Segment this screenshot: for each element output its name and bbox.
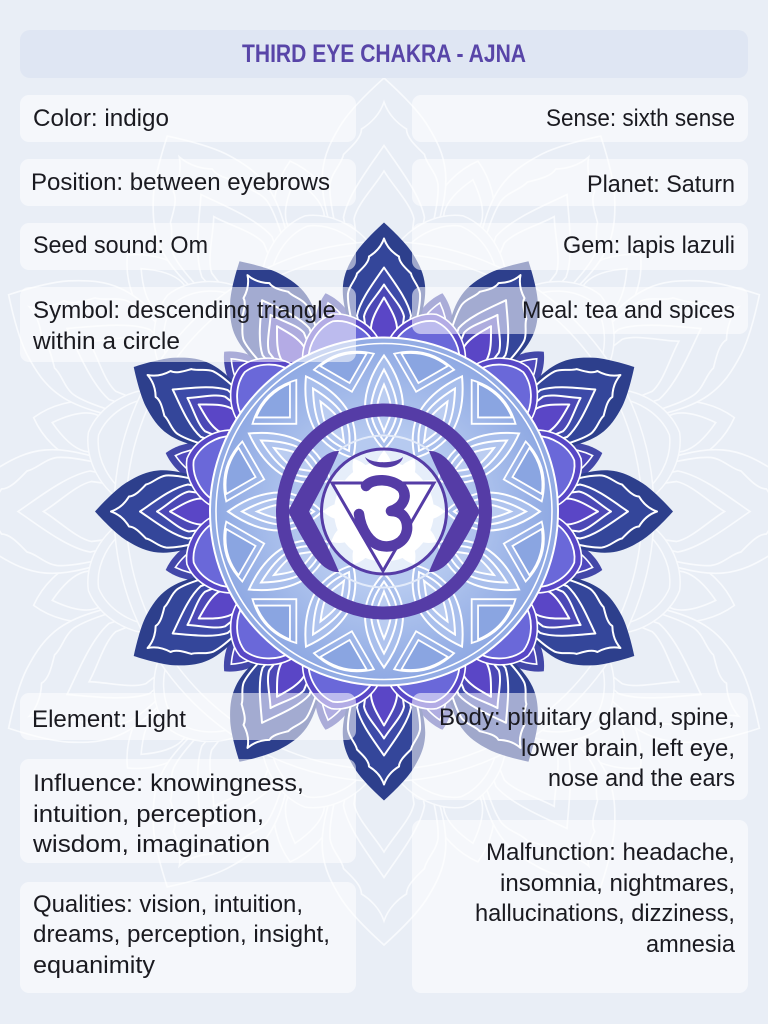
om sign <box>359 480 407 546</box>
panel: malfunction: insomnia, nightmares, <box>500 870 735 897</box>
watermark rings <box>114 242 654 782</box>
wide violet petals ring <box>177 304 591 719</box>
inner circle <box>322 449 446 574</box>
small petals ring <box>161 288 607 735</box>
panel: body <box>412 693 748 800</box>
icon: ajna symbol <box>282 410 486 613</box>
lens pattern ring <box>228 356 540 668</box>
panel: gem <box>412 223 748 270</box>
panel: influence: Influence: knowingness, <box>33 770 304 797</box>
panel: qualities <box>20 882 356 993</box>
panel: influence: wisdom, imagination <box>32 831 270 858</box>
triangle pattern ring <box>218 346 550 677</box>
panel: position <box>20 159 356 206</box>
panel: body: Body: pituitary gland, spine, <box>439 704 735 731</box>
right crescent <box>429 451 480 572</box>
watermark small petals <box>26 153 742 870</box>
chakra mandala <box>95 222 673 800</box>
panel: meal: Meal: tea and spices <box>522 297 735 324</box>
panel: position: Position: between eyebrows <box>31 169 330 196</box>
panel: symbol: within a circle <box>32 328 180 355</box>
panel: malfunction: Malfunction: headache, <box>486 839 735 866</box>
panel: malfunction: amnesia <box>646 931 736 958</box>
panel: sense: Sense: sixth sense <box>546 105 735 132</box>
panel: planet <box>412 159 748 206</box>
panel: seed sound <box>20 223 356 270</box>
panel: symbol <box>20 287 356 362</box>
panel: color: Color: indigo <box>33 105 169 132</box>
panel: color <box>20 95 356 142</box>
panel: gem: Gem: lapis lazuli <box>563 232 735 259</box>
panel: qualities: equanimity <box>33 952 155 979</box>
panel: meal <box>412 287 748 334</box>
left crescent <box>288 451 339 572</box>
panel: body: lower brain, left eye, <box>521 735 735 762</box>
panel: body: nose and the ears <box>548 765 735 792</box>
panel: symbol: Symbol: descending triangle <box>33 297 336 324</box>
watermark lobes <box>73 200 695 823</box>
panel: element: Element: Light <box>32 706 186 733</box>
panel: malfunction <box>412 820 748 993</box>
panel: influence <box>20 759 356 863</box>
panel: planet: Planet: Saturn <box>587 171 735 198</box>
heading: THIRD EYE CHAKRA - AJNA <box>242 40 526 68</box>
inner pale flower <box>308 436 460 588</box>
large indigo petals ring <box>95 222 673 800</box>
panel: seed sound: Seed sound: Om <box>33 232 208 259</box>
panel: malfunction: hallucinations, dizziness, <box>475 900 735 927</box>
panel: title <box>20 30 748 78</box>
descending triangle <box>332 483 434 571</box>
panel: qualities: Qualities: vision, intuition, <box>33 891 303 918</box>
panel: element <box>20 693 356 740</box>
panel: influence: intuition, perception, <box>33 801 264 828</box>
outer purple ring <box>282 410 486 613</box>
panel: qualities: dreams, perception, insight, <box>33 921 330 948</box>
top crescent <box>365 457 403 468</box>
light blue disc <box>210 338 558 686</box>
panel: sense <box>412 95 748 142</box>
